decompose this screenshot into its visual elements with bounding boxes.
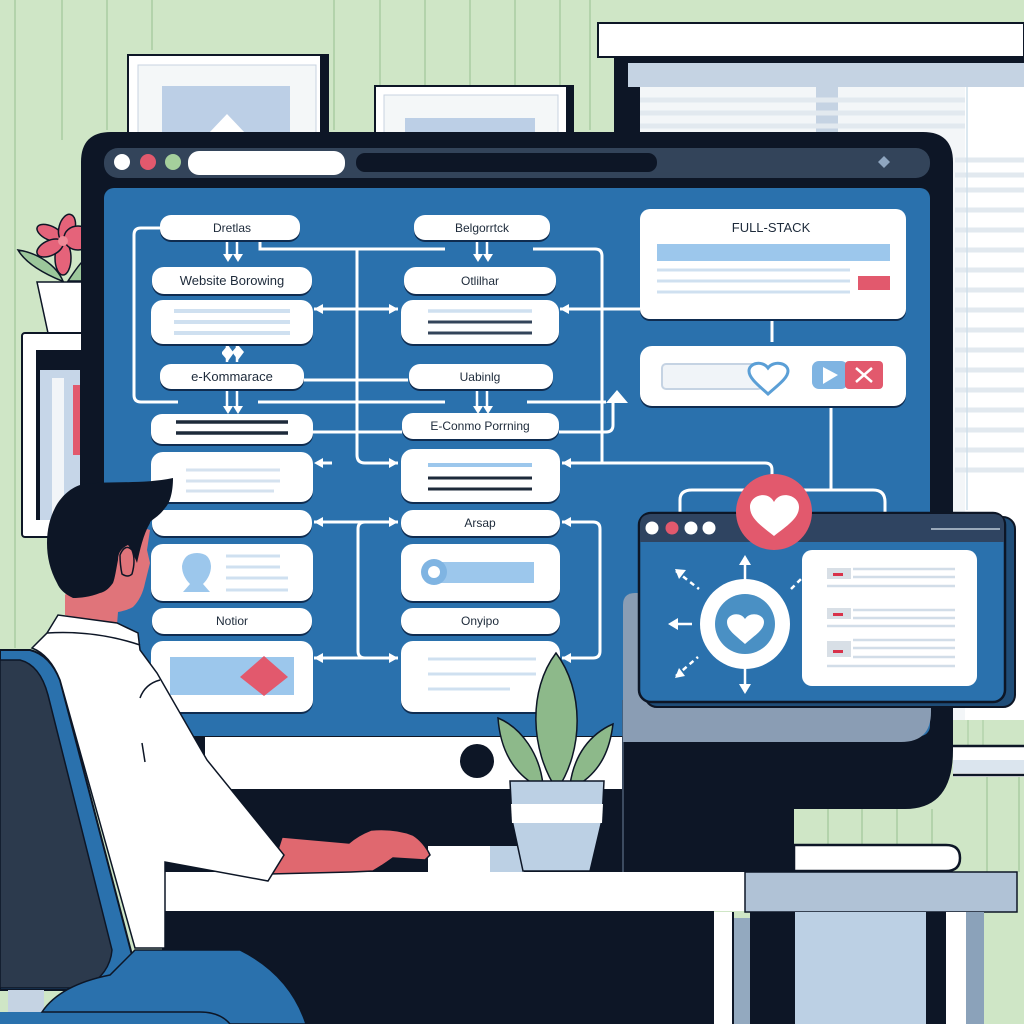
node: Otlilhar (404, 267, 556, 294)
framed picture middle (375, 86, 573, 138)
icon: red heart badge (736, 474, 812, 550)
node: Website Borowing: Website Borowing (180, 273, 284, 288)
desk (162, 845, 1017, 1024)
node: Belgorrtck (414, 215, 550, 240)
secondary monitor stand panel (623, 593, 931, 742)
node: blank pill (152, 510, 312, 536)
icon: play and close buttons (812, 361, 883, 389)
document card (802, 550, 977, 686)
address bar (188, 151, 345, 175)
node: text lines panel (151, 452, 313, 502)
node: Notior (152, 608, 312, 634)
node: Dretlas (160, 215, 300, 240)
shirt (32, 615, 284, 948)
panel: small browser window (639, 513, 1015, 707)
ear (120, 547, 134, 576)
node: Belgorrtck: Belgorrtck (455, 221, 510, 235)
plant (498, 653, 613, 871)
node: E-Conmo Porrning: E-Conmo Porrning (430, 419, 530, 433)
search bar (356, 153, 657, 172)
node: e-Kommarace (160, 364, 304, 389)
panel: full-stack card (640, 209, 906, 319)
window with blinds (598, 23, 1024, 777)
node: Onyipo (401, 608, 560, 634)
node: e-Kommarace: e-Kommarace (191, 369, 273, 384)
flower on shelf (18, 212, 92, 333)
shirt collar and creases (47, 632, 160, 762)
node: dark lines panel (401, 300, 559, 344)
node: Uabinlg: Uabinlg (460, 370, 500, 384)
icon: central heart target (668, 555, 803, 694)
node: Notior: Notior (216, 614, 248, 628)
shelf with books (22, 333, 84, 537)
middle column flow nodes (401, 215, 560, 712)
node: mixed lines panel (401, 449, 560, 502)
framed picture left (128, 55, 328, 140)
plant pot (510, 781, 604, 871)
person (32, 478, 430, 1024)
browser buttons (114, 154, 181, 170)
node: list panel (151, 300, 313, 344)
keyboard (428, 846, 524, 872)
flow connector lines (134, 228, 885, 658)
node: lines card (401, 641, 560, 712)
icon: heart outline (749, 363, 788, 394)
left column flow nodes (151, 215, 313, 712)
node: Website Borowing (152, 267, 312, 294)
monitor (81, 132, 953, 872)
node: Dretlas: Dretlas (213, 221, 251, 235)
node: Arsap: Arsap (464, 516, 496, 530)
node: profile (151, 544, 313, 601)
node: media card (151, 641, 313, 712)
node: Onyipo: Onyipo (461, 614, 499, 628)
node: settings (401, 544, 560, 601)
chair (0, 650, 240, 1024)
node: Arsap (401, 510, 560, 536)
trousers (42, 950, 306, 1024)
hair (47, 478, 173, 598)
node: E-Conmo Porrning (402, 413, 559, 439)
neck and face (65, 520, 150, 625)
flow arrowheads (222, 254, 628, 663)
panel: action bar (640, 346, 906, 406)
flower pot (37, 282, 84, 333)
arm and hand (270, 830, 430, 874)
node: Uabinlg (409, 364, 553, 389)
heading: FULL-STACK (732, 220, 811, 235)
node: Otlilhar: Otlilhar (461, 274, 499, 288)
node: dark lines bar (151, 414, 313, 444)
